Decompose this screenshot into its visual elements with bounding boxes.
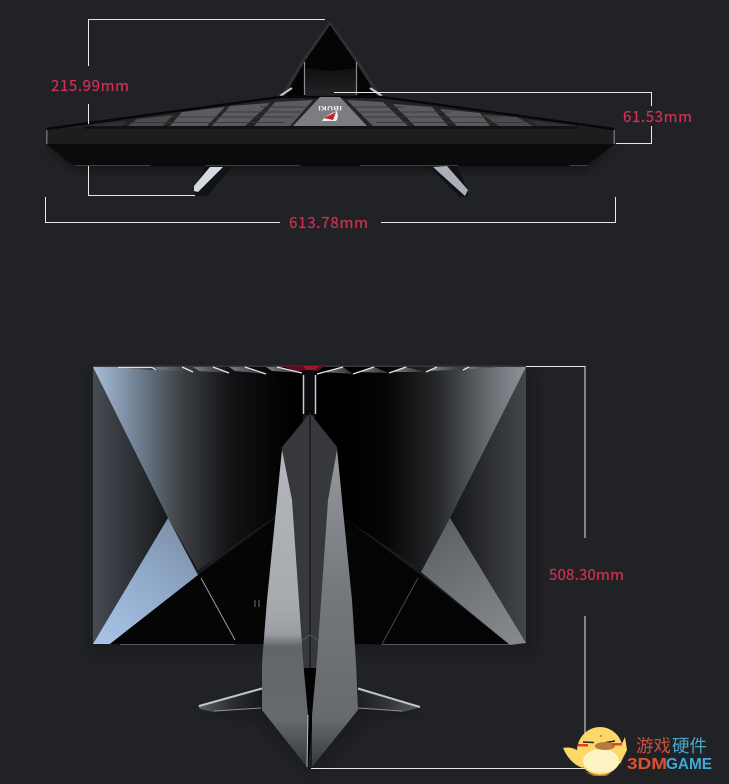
logo panel <box>293 97 367 126</box>
right rear panel <box>315 367 526 645</box>
icon: yellow chick <box>563 727 627 776</box>
dimension: depth 215.99mm <box>51 20 325 196</box>
dimension: thickness 61.53mm <box>334 92 692 144</box>
dimension: width 613.78mm <box>46 197 616 233</box>
left rear panel <box>93 367 303 644</box>
logo text: game hardware <box>636 733 707 758</box>
vents <box>83 100 578 126</box>
logo panel: IBUKI <box>318 104 342 113</box>
logo text: game hardware: 游戏 <box>636 733 671 758</box>
dimension: depth 215.99mm: 215.99mm <box>51 75 129 96</box>
logo text: 3DMGAME: GAME <box>666 756 712 773</box>
top edge clips <box>93 366 526 374</box>
dimension: height 508.30mm <box>311 366 624 768</box>
logo text: 3DMGAME: 3DM <box>627 756 667 773</box>
watermark logo <box>563 727 712 776</box>
logo text: 3DMGAME <box>627 756 712 773</box>
stand <box>198 413 421 775</box>
icon: monitor body <box>46 97 615 170</box>
top view monitor <box>46 21 615 197</box>
logo text: game hardware: 硬件 <box>672 733 707 758</box>
legs <box>194 166 468 197</box>
rear view monitor <box>90 366 536 775</box>
dimension: thickness 61.53mm: 61.53mm <box>623 106 692 127</box>
dimension: height 508.30mm: 508.30mm <box>549 564 624 585</box>
dimension: width 613.78mm: 613.78mm <box>289 212 368 233</box>
icon: stand triangle behind monitor <box>280 21 382 97</box>
neck <box>303 370 316 415</box>
